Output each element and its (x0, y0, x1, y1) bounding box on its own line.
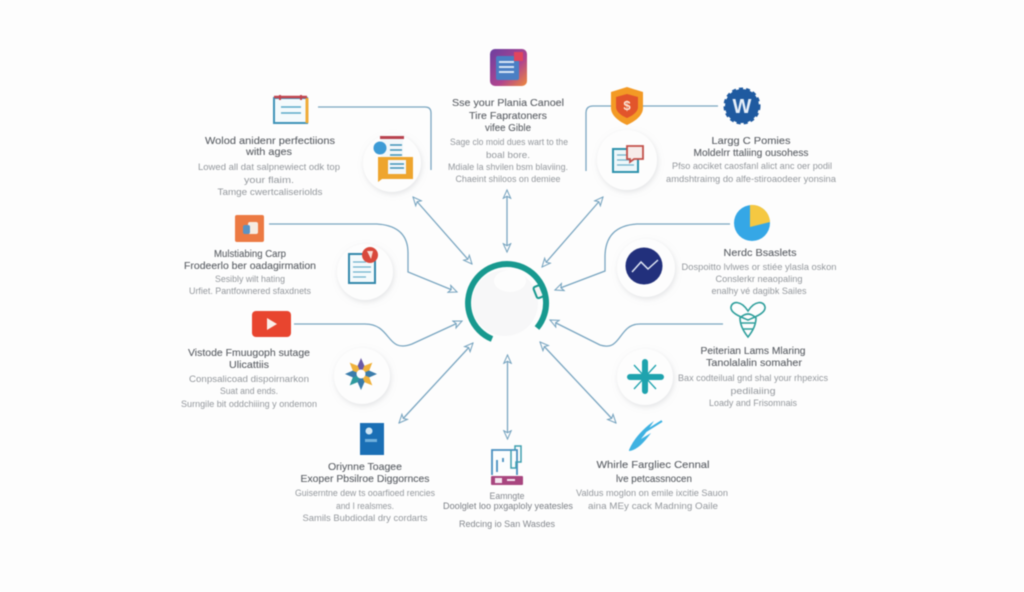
icon: star burst (334, 348, 390, 404)
text: left middle: Urfiet. Pantfownered sfaxdnets (189, 286, 311, 296)
text: right lower: Tanolalalin somaher (706, 357, 803, 369)
text: bottom centre (443, 491, 573, 529)
text: left lower: Suat and ends. (220, 386, 278, 396)
icon: document badge (363, 134, 421, 192)
icon: trend line badge (617, 239, 675, 297)
icon: teal cross (617, 349, 673, 405)
icon: calendar (274, 95, 307, 123)
connector lines and arrows (269, 106, 730, 439)
panel: left lower (181, 311, 390, 409)
panel: right lower (617, 303, 828, 408)
text: bottom left: and I realsmes. (336, 501, 394, 511)
panel: top centre (448, 49, 568, 184)
text: left lower: Ulicattiis (229, 359, 269, 371)
panel: left middle (184, 215, 393, 300)
text: left middle: Mulstiabing Carp (214, 248, 286, 260)
text: right middle: Nerdc Bsaslets (724, 247, 796, 259)
text: bottom right: Whirle Fargliec Cennal (596, 459, 710, 471)
text: bottom left: Samils Bubdiodal dry cordarts (302, 513, 428, 523)
text: left lower: Conpsalicoad dispoirnarkon (189, 374, 309, 384)
text: top centre: Tire Fapratoners (469, 110, 547, 122)
text: right lower (678, 345, 828, 408)
text: top left: with ages (245, 146, 292, 158)
text: top centre: Sse your Plania Canoel (452, 97, 564, 109)
text: top left: Wolod anidenr perfectiions (205, 135, 335, 147)
text: top left: Tamge cwertcaliseriolds (218, 187, 323, 197)
text: bottom right: lve petcassnocen (616, 473, 692, 485)
icon: blue book (360, 423, 384, 455)
text: top left (198, 135, 340, 197)
text: right lower: Loady and Frisomnais (709, 398, 797, 408)
text: right middle: Dospoitto lvlwes or stiée ylasla oskon (682, 262, 836, 272)
text: bottom centre: Doolglet loo pxgaploly yeatesles (443, 501, 573, 511)
text: bottom centre: Eamngte (490, 491, 524, 502)
text: right lower: pedilaiing (730, 386, 776, 396)
text: top left: your flaim. (244, 175, 294, 185)
panel: bottom right (576, 421, 728, 511)
text: top centre: Chaeint shiloos on demiee (456, 174, 560, 184)
text: bottom centre: Redcing io San Wasdes (459, 519, 556, 529)
text: left middle: Frodeerlo ber oadagirmation (184, 260, 316, 272)
icon: feather (629, 421, 662, 451)
text: bottom left: Guiserntne dew ts ooarfioed rencies (295, 488, 435, 498)
panel: bottom centre (443, 446, 573, 529)
icon: shield (611, 87, 643, 125)
text: right lower: Peiterian Lams Mlaring (700, 345, 806, 357)
icon: device kit (491, 446, 523, 485)
icon: W badge (725, 89, 759, 123)
icon: pie chart (734, 205, 770, 241)
icon: W badge: W (733, 96, 752, 118)
icon: app tile (490, 49, 527, 86)
text: right middle: Conslerkr neaopaling (716, 274, 802, 284)
panel: right middle (617, 205, 836, 297)
text: right middle: enalhy vé dagibk Sailes (712, 286, 807, 296)
text: bottom right: aina MEy cack Madning Oaile (588, 501, 718, 511)
text: right lower: Bax codteilual gnd shal your rhpexics (678, 373, 828, 383)
text: left lower: Vistode Fmuugoph sutage (188, 347, 310, 359)
text: top right: Largg C Pomies (712, 135, 790, 147)
central hub ring (468, 264, 546, 339)
text: right middle (682, 247, 836, 296)
text: top right: Moldelrr ttaliing ousohess (694, 147, 808, 159)
text: bottom left (295, 461, 435, 523)
text: top centre (448, 97, 568, 184)
text: left middle: Sesibly wilt hating (215, 274, 285, 284)
text: top right: amdshtraimg do alfe-stiroaodeer yonsina (666, 174, 836, 184)
icon: shield: $ (623, 98, 631, 113)
text: bottom right (576, 459, 728, 511)
text: top right (666, 135, 836, 184)
text: left lower: Surngile bit oddchiiing y ondemon (181, 399, 317, 409)
text: top right: Pfso aociket caosfanl alict anc oer podil (672, 161, 832, 171)
panel: bottom left (295, 423, 435, 523)
panel: top right (597, 87, 836, 190)
icon: note with pin (337, 244, 393, 300)
panel: top left (198, 95, 421, 197)
text: top centre: vifee Gible (485, 122, 531, 134)
icon: video play (252, 311, 291, 337)
text: left middle (184, 248, 316, 296)
text: bottom right: Valdus moglon on emile ixcitie Sauon (576, 488, 728, 498)
text: top centre: Sage clo moid dues wart to the (450, 137, 568, 147)
icon: bee (731, 303, 765, 337)
text: bottom left: Oriynne Toagee (328, 461, 402, 473)
icon: chat document (597, 130, 657, 190)
text: left lower (181, 347, 317, 409)
icon: orange tile (235, 215, 264, 242)
text: top left: Lowed all dat salpnewiect odk top (198, 162, 340, 172)
text: top centre: boal bore. (486, 150, 530, 160)
text: bottom left: Exoper Pbsilroe Diggornces (300, 473, 430, 485)
text: top centre: Mdiale la shvilen bsm blaviing. (448, 162, 568, 172)
